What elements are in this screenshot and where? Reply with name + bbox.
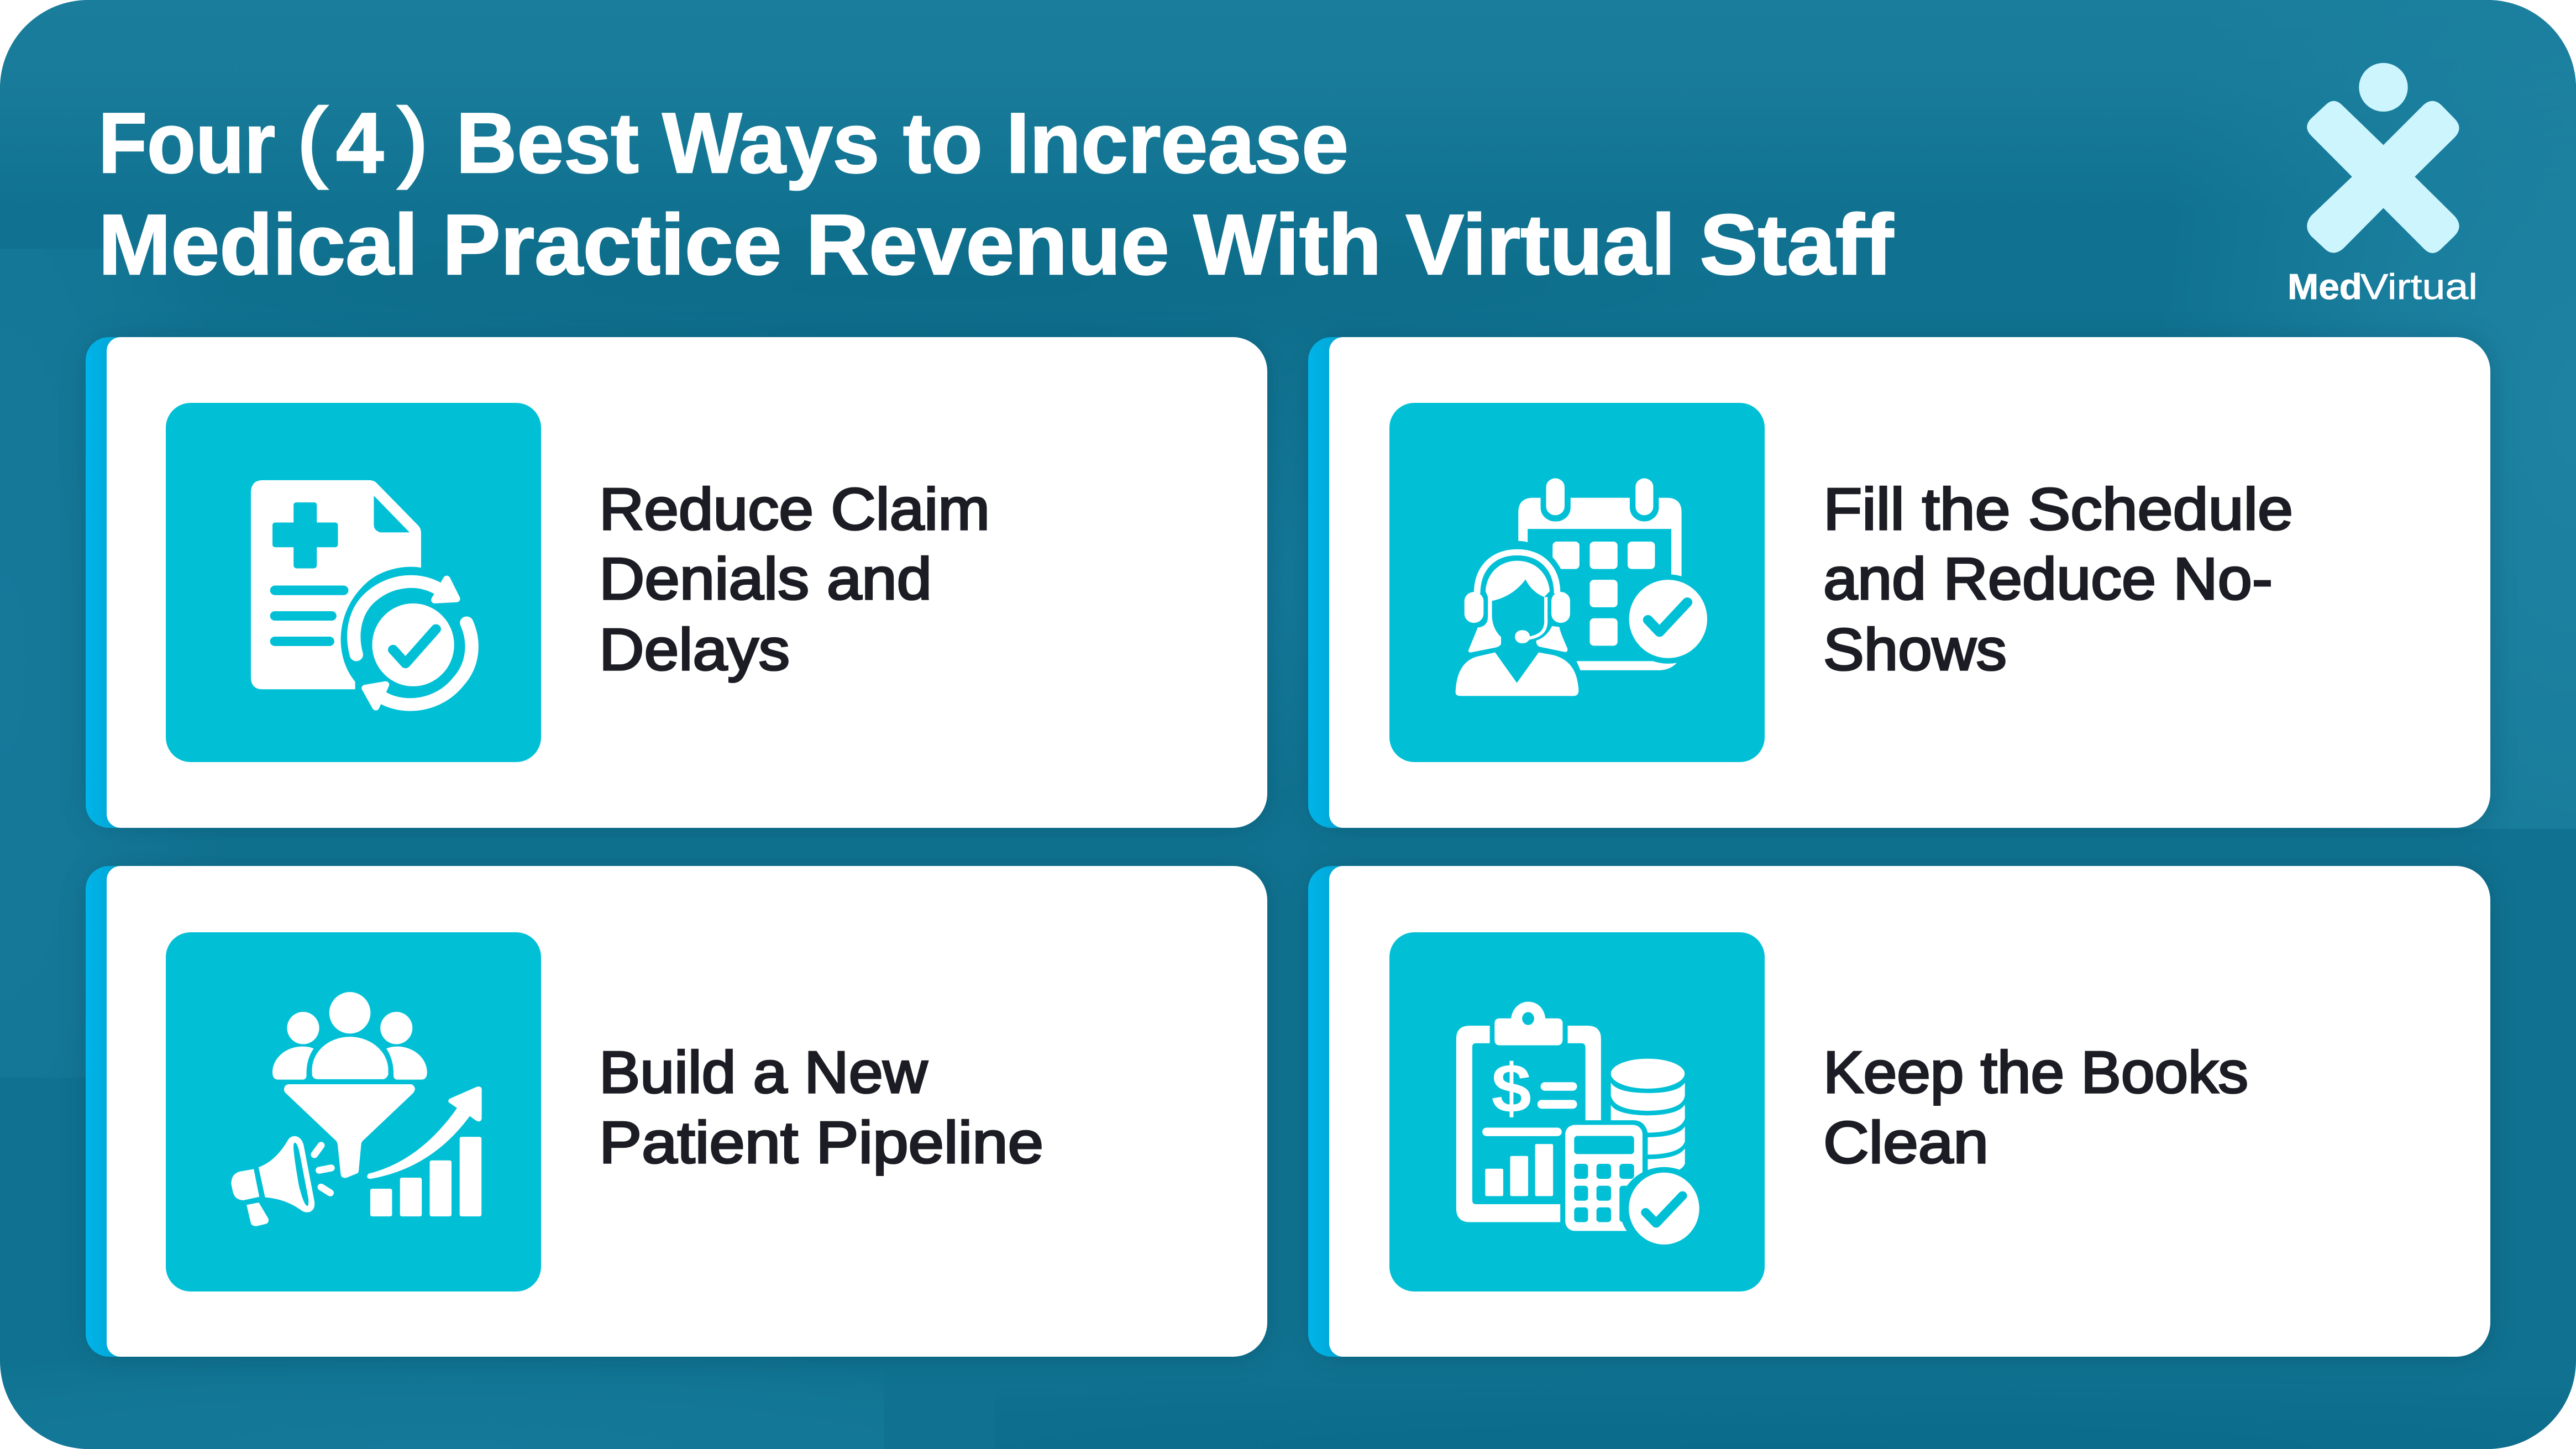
logo wordmark: Med [2288,266,2362,307]
card 4 text: Keep the Books [1823,1039,2248,1105]
panel: card 1 [86,337,1267,828]
logo wordmark [2288,266,2478,307]
logo mark [2307,63,2459,253]
card 1 text: Denials and [599,545,932,612]
panel: card 3 [86,866,1267,1357]
card shadows [86,338,2491,1358]
card 2 text: Fill the Schedule [1823,476,2293,542]
card 3 text [599,1039,1043,1175]
title: Best Ways to Increase [456,95,1349,191]
title [98,90,1893,292]
card 1 text [599,476,990,683]
card 1 text: Delays [599,616,790,683]
title: ( [297,90,327,189]
card 2 text [1823,476,2293,683]
title: Medical Practice Revenue With Virtual Staff [98,197,1893,292]
card 2 text: and Reduce No- [1823,545,2273,612]
logo: MedVirtual [2288,63,2478,307]
card 4 text [1823,1039,2248,1175]
logo wordmark: Virtual [2360,266,2478,307]
title: Four [98,95,275,191]
panel: card 2 [1308,337,2490,828]
icon tile: bookkeeping [1389,932,1765,1292]
card 4 text: Clean [1823,1109,1989,1175]
icon tile: calendar and receptionist [1389,403,1765,762]
icon tile: medical claim with check [166,403,541,762]
card 2 text: Shows [1823,616,2007,683]
card 3 text: Build a New [599,1039,928,1105]
card 3 text: Patient Pipeline [599,1109,1043,1175]
icon tile: bookkeeping: $ [1491,1049,1531,1127]
card 1 text: Reduce Claim [599,476,990,542]
panel: card 4 [1308,866,2490,1357]
icon tile: patient funnel and growth [166,932,541,1292]
title: 4 [336,95,384,191]
title: ) [398,90,428,189]
